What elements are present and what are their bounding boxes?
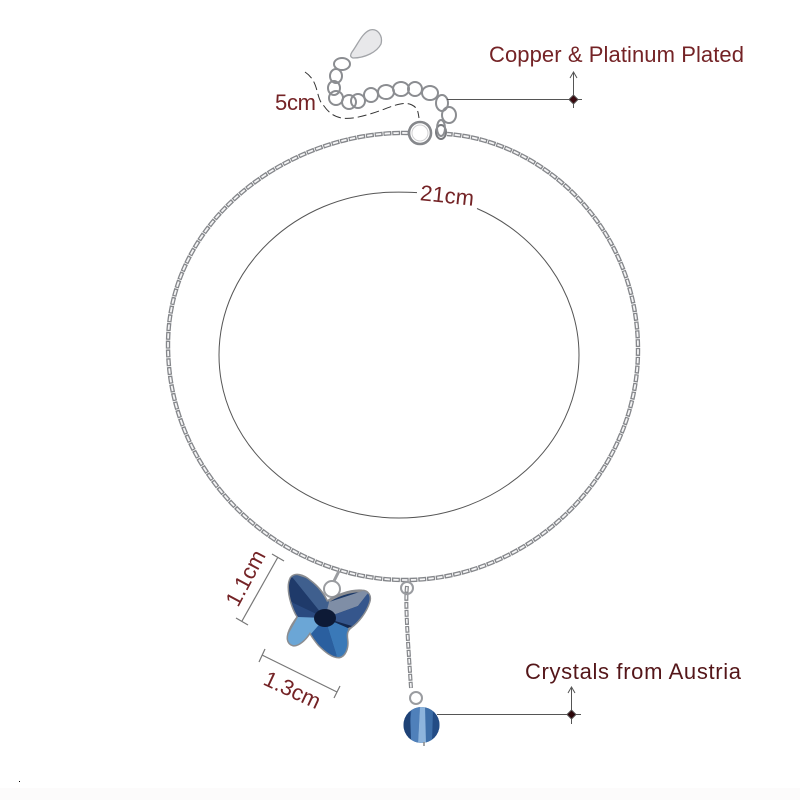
label: 5cm: 5cm <box>275 90 316 115</box>
leader: Crystals from Austria <box>437 687 581 724</box>
chain: main anklet loop <box>168 133 638 580</box>
clasp: spring ring <box>409 122 446 144</box>
dimension: 1.3cm line <box>259 649 340 698</box>
icon: butterfly pendant <box>284 571 372 660</box>
label: Copper & Platinum Plated: Copper & Platinum Plated <box>489 42 744 67</box>
label: 1.1cm: 1.1cm <box>220 546 271 610</box>
drop chain <box>401 582 422 704</box>
dashed measure curve: 5cm <box>305 72 419 118</box>
label: 21cm: 21cm <box>419 180 475 211</box>
icon: crystal bead <box>403 706 441 746</box>
leader: Copper & Platinum Plated <box>447 72 582 108</box>
icon: drop tag <box>351 30 381 58</box>
measure circle: 21cm <box>219 192 579 518</box>
dimension: 1.1cm line <box>236 554 284 625</box>
label: 1.3cm: 1.3cm <box>260 666 325 714</box>
extension chain <box>328 58 456 136</box>
label: Crystals from Austria: Crystals from Austria <box>525 659 742 684</box>
